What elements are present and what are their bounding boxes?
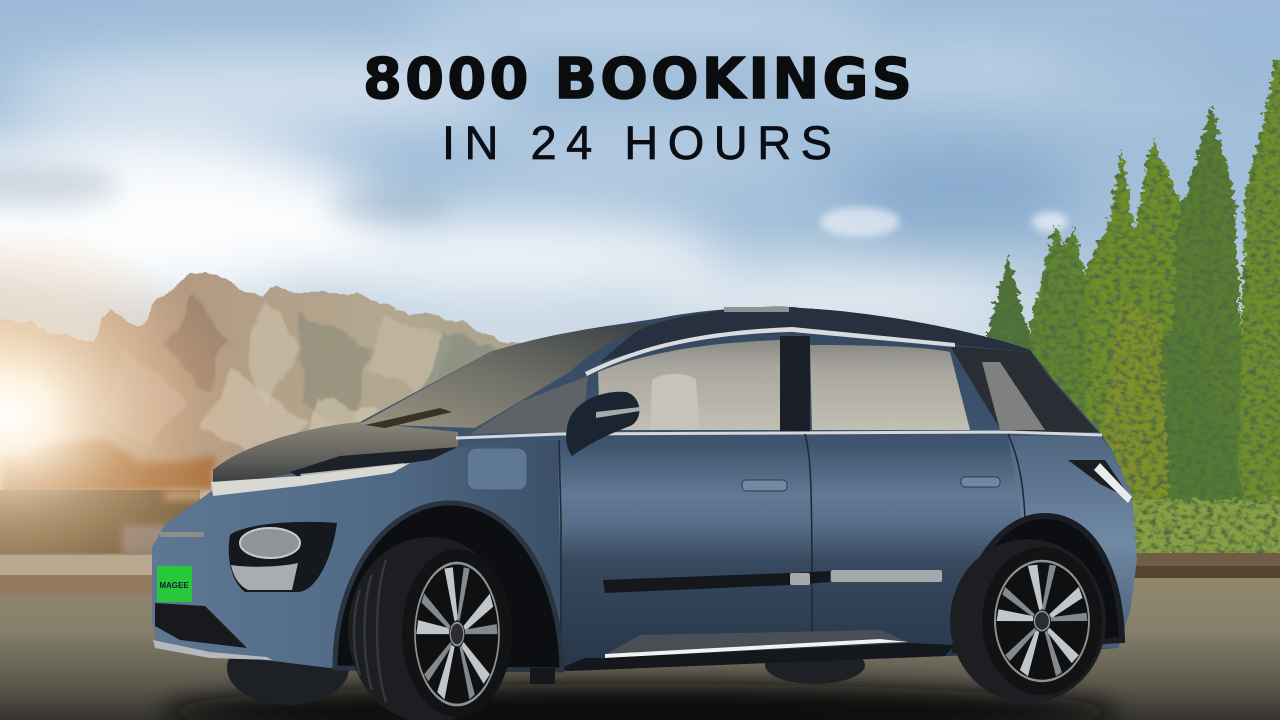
car body	[152, 307, 1137, 670]
background: road and kerb	[0, 553, 1280, 720]
background: pine forest	[985, 60, 1280, 560]
title	[363, 47, 912, 169]
front wheel arch	[335, 503, 562, 670]
hood slit and daytime running light	[211, 447, 458, 496]
chrome lip	[153, 640, 272, 660]
chrome roof strip	[585, 327, 955, 376]
wiper	[365, 408, 452, 428]
far side wheels	[227, 631, 865, 705]
mudflap	[530, 668, 555, 684]
side mirror	[566, 392, 639, 456]
window pillar	[780, 336, 810, 432]
rear wheel arch	[955, 516, 1122, 650]
electric MPV car	[152, 307, 1137, 720]
hood	[213, 422, 458, 488]
front wheel	[348, 537, 512, 720]
background: sky with clouds	[0, 0, 1280, 560]
roof	[600, 307, 1052, 378]
green number plate: MAGEE	[159, 581, 189, 590]
rear side window	[810, 345, 970, 430]
lower grille	[155, 603, 247, 648]
mirror chrome strip	[596, 407, 640, 418]
rear quarter panel	[1008, 436, 1137, 648]
chrome belt line	[456, 432, 1102, 438]
subheading: in 24 hours: IN 24 HOURS	[442, 116, 832, 169]
rear pillar and quarter glass	[950, 346, 1098, 432]
rear wheel	[950, 539, 1106, 703]
charge flap	[467, 448, 527, 490]
seat in front window	[650, 374, 700, 430]
door handles	[742, 480, 787, 491]
windshield	[360, 324, 655, 428]
roof antenna strip	[724, 307, 789, 312]
background: lake and sunset glow	[0, 225, 245, 605]
green number plate	[157, 566, 192, 602]
maker script	[160, 532, 204, 537]
A-pillar triangle window	[470, 376, 588, 434]
side skirt	[605, 630, 908, 655]
headlamp	[229, 522, 337, 592]
door trim strip	[603, 571, 830, 593]
tail light	[1068, 460, 1132, 503]
front side window	[598, 340, 780, 430]
background: mountain range	[0, 272, 540, 475]
heading: 8000 bookings: 8000 BOOKINGS	[363, 47, 912, 112]
door shut lines	[559, 434, 1025, 650]
front fender panel	[152, 440, 561, 668]
